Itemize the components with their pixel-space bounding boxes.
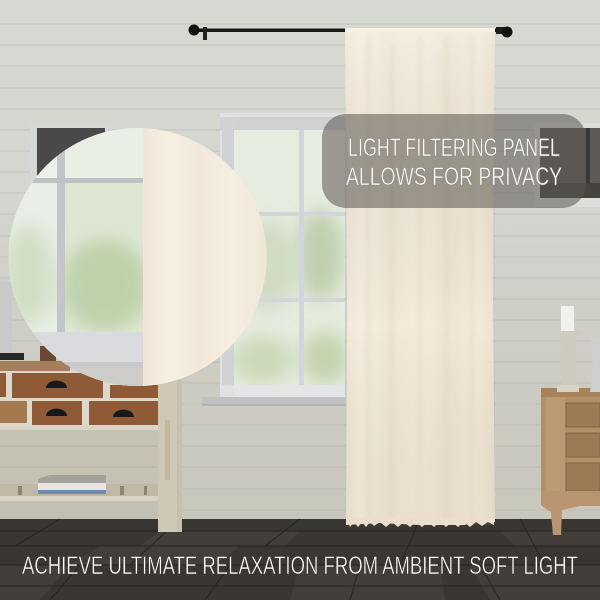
caption panel: privacy	[322, 114, 586, 208]
caption text	[346, 134, 562, 191]
zoomed glass	[9, 183, 57, 332]
curtain panel	[345, 28, 495, 527]
window glass	[230, 130, 349, 385]
table leg	[158, 380, 182, 532]
fringe hem	[348, 518, 494, 527]
floor	[0, 519, 600, 600]
left picture frame	[30, 122, 112, 212]
zoomed curtain	[143, 120, 268, 390]
vase	[590, 338, 600, 392]
side cabinet	[541, 388, 600, 535]
drawer handles	[46, 381, 134, 417]
console table	[0, 346, 182, 532]
lower wall	[0, 501, 158, 519]
lantern	[0, 282, 24, 360]
right framed picture	[534, 123, 600, 207]
lower shelf	[0, 484, 158, 501]
window	[202, 113, 349, 406]
candle holder	[557, 306, 581, 392]
drawers	[12, 373, 160, 425]
curtain rod	[188, 24, 512, 40]
table top	[0, 361, 70, 371]
books	[38, 475, 106, 494]
window sill	[202, 397, 345, 404]
zoom detail circle	[0, 120, 268, 390]
